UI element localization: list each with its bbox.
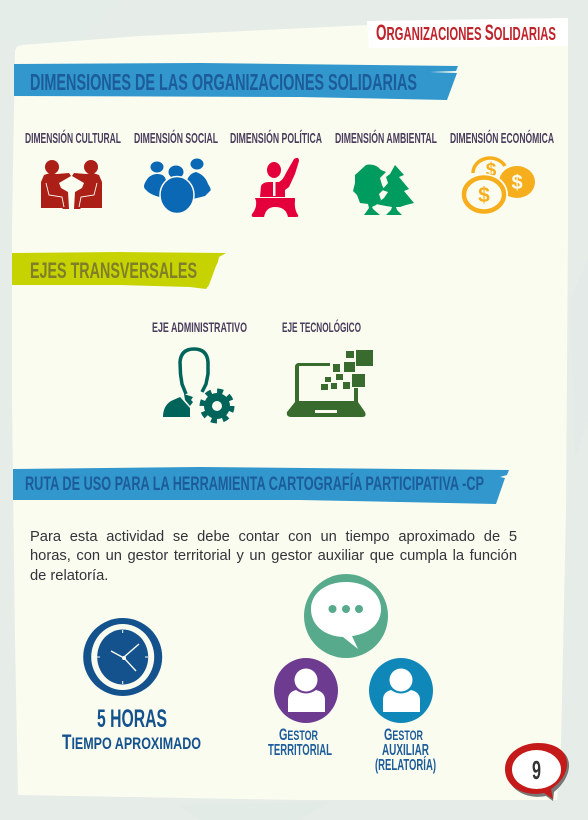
text: 5 horas tiempo aproximado <box>62 705 201 754</box>
icon: coins (económica) <box>460 158 535 216</box>
text: 5 horas tiempo aproximado: TIEMPO APROXIMADO <box>62 731 201 754</box>
icon: two people talking (cultural) <box>41 160 102 209</box>
icon: gestor territorial <box>274 658 338 723</box>
banner: Ruta de uso <box>13 467 509 504</box>
dimension labels: DIMENSIÓN CULTURAL <box>25 129 121 147</box>
icon: group of people (social) <box>144 158 211 214</box>
label: gestor territorial <box>268 725 332 759</box>
paragraph text: Para esta actividad se debe contar con un tiempo aproximado de 5 <box>30 529 517 545</box>
label: gestor auxiliar relatoría: (RELATORÍA) <box>375 755 436 774</box>
banner: Dimensiones de las organizaciones solidarias <box>14 63 458 100</box>
icon: gestor auxiliar <box>369 658 433 723</box>
label: gestor auxiliar relatoría: AUXILIAR <box>382 742 429 759</box>
icon: trees (ambiental) <box>353 165 414 215</box>
icon: administrator with gear <box>163 349 232 420</box>
page number badge <box>505 743 569 801</box>
label: gestor territorial: TERRITORIAL <box>268 742 332 759</box>
paragraph text: de relatoría. <box>30 568 108 584</box>
icon: laptop with pixels <box>287 350 373 417</box>
paragraph text <box>30 529 517 584</box>
dimension labels: DIMENSIÓN SOCIAL <box>134 129 218 147</box>
icon: coins (económica): $ <box>511 172 523 194</box>
paragraph text: horas, con un gestor territorial y un gestor auxiliar que cumpla la función <box>30 548 517 564</box>
icon: coins (económica): $ <box>486 160 497 181</box>
axis labels <box>152 318 361 335</box>
dimension labels: DIMENSIÓN AMBIENTAL <box>335 129 437 147</box>
axis labels: EJE ADMINISTRATIVO <box>152 319 247 335</box>
icon: person raising hand at podium (política) <box>252 158 299 217</box>
label: gestor auxiliar relatoría: GESTOR <box>384 725 423 744</box>
banner: Ejes transversales <box>12 252 226 289</box>
text: 5 horas tiempo aproximado: 5 HORAS <box>97 705 167 733</box>
axis labels: EJE TECNOLÓGICO <box>282 318 361 335</box>
dimension labels: DIMENSIÓN POLÍTICA <box>230 129 322 147</box>
icon: speech bubble <box>304 574 388 658</box>
banner: Ejes transversales: EJES TRANSVERSALES <box>30 258 197 283</box>
page number badge: 9 <box>532 755 541 785</box>
icon: clock <box>83 618 162 696</box>
label: gestor territorial: GESTOR <box>279 725 318 744</box>
icon: coins (económica): $ <box>478 184 490 207</box>
label: gestor auxiliar relatoría <box>375 725 436 774</box>
dimension labels <box>25 129 554 147</box>
